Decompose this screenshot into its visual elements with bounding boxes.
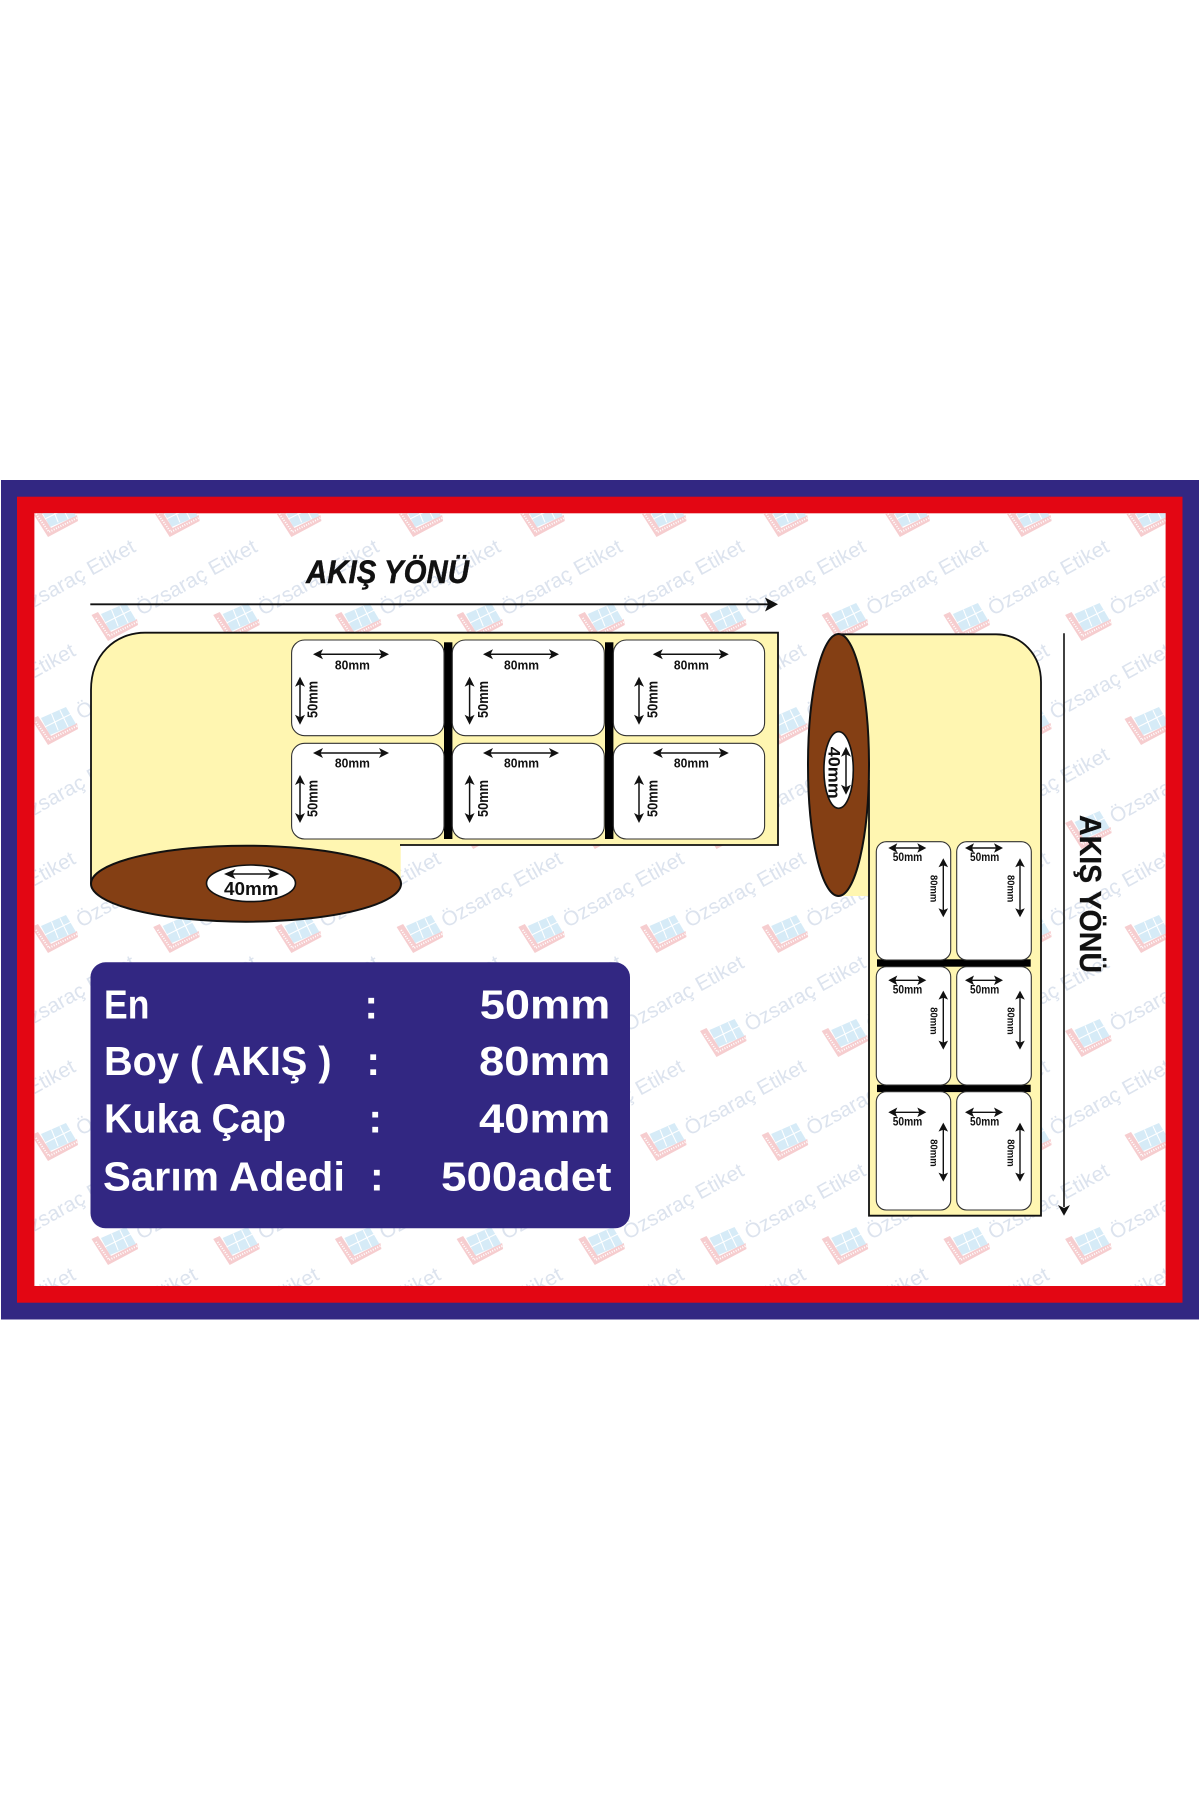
- watermark pattern: Özsaraç Etiket logos: Özsaraç Etiket: [254, 743, 383, 828]
- red inner frame: [17, 497, 1182, 1303]
- watermark pattern: Özsaraç Etiket logos: Özsaraç Etiket: [376, 743, 505, 828]
- heading: AKIŞ YÖNÜ horizontal: AKIŞ YÖNÜ: [305, 554, 470, 590]
- label: column 1 row 2: 50mm: [305, 780, 322, 817]
- arrow: vertical flow direction: [1058, 633, 1070, 1216]
- row: Boy: [104, 1038, 610, 1084]
- watermark pattern: Özsaraç Etiket logos: Özsaraç Etiket: [254, 1159, 383, 1244]
- watermark pattern: Özsaraç Etiket logos: Özsaraç Etiket: [1046, 639, 1175, 724]
- watermark pattern: Özsaraç Etiket logos: Özsaraç Etiket: [681, 1263, 810, 1348]
- label: column 3 row 2: 50mm: [644, 780, 661, 817]
- arrow: horizontal flow direction: [90, 598, 778, 612]
- row: En: :: [364, 981, 378, 1027]
- label: column 2 row 1: 50mm: [475, 681, 492, 718]
- watermark pattern: Özsaraç Etiket logos: Özsaraç Etiket: [559, 847, 688, 932]
- watermark pattern: Özsaraç Etiket logos: Özsaraç Etiket: [984, 951, 1113, 1036]
- label: row 3 right: 50mm: [970, 1116, 999, 1128]
- label: column 2 row 2: [452, 743, 604, 839]
- label sheet separators: [877, 959, 1031, 1092]
- label: row 1 right: 50mm: [970, 852, 999, 864]
- horizontal label roll: [91, 633, 778, 922]
- label: column 1 row 1: 50mm: [305, 681, 322, 718]
- watermark pattern: Özsaraç Etiket logos: Özsaraç Etiket: [72, 847, 201, 932]
- watermark pattern: Özsaraç Etiket logos: Özsaraç Etiket: [924, 1055, 1053, 1140]
- row: Boy: Boy ( AKIŞ ): [104, 1038, 332, 1084]
- core hole with 40mm dimension: [824, 732, 853, 808]
- watermark pattern: Özsaraç Etiket logos: Özsaraç Etiket: [862, 743, 991, 828]
- watermark pattern: Özsaraç Etiket logos: Özsaraç Etiket: [194, 1263, 323, 1348]
- watermark pattern: Özsaraç Etiket logos: Özsaraç Etiket: [132, 535, 261, 620]
- row: Sarım Adedi: 500adet: [441, 1154, 612, 1200]
- watermark pattern: Özsaraç Etiket logos: Özsaraç Etiket: [11, 1159, 140, 1244]
- watermark pattern: Özsaraç Etiket logos: Özsaraç Etiket: [802, 639, 931, 724]
- watermark pattern: Özsaraç Etiket logos: Özsaraç Etiket: [741, 535, 870, 620]
- row: Sarım Adedi: :: [370, 1154, 384, 1200]
- navy outer frame: [1, 480, 1199, 1320]
- watermark pattern: Özsaraç Etiket logos: Özsaraç Etiket: [497, 743, 626, 828]
- label: column 1 row 2: 80mm: [335, 756, 370, 771]
- label: row 1 right: [957, 842, 1031, 960]
- label: row 1 left: 50mm: [893, 852, 922, 864]
- watermark pattern: Özsaraç Etiket logos: Özsaraç Etiket: [924, 1263, 1053, 1348]
- watermark pattern: Özsaraç Etiket logos: Özsaraç Etiket: [132, 1159, 261, 1244]
- watermark pattern: Özsaraç Etiket logos: Özsaraç Etiket: [984, 743, 1113, 828]
- watermark pattern: Özsaraç Etiket logos: Özsaraç Etiket: [681, 639, 810, 724]
- watermark pattern: Özsaraç Etiket logos: Özsaraç Etiket: [11, 743, 140, 828]
- watermark pattern: Özsaraç Etiket logos: [34, 513, 1166, 1286]
- watermark pattern: Özsaraç Etiket logos: Özsaraç Etiket: [741, 1159, 870, 1244]
- label: column 3 row 1: 50mm: [644, 681, 661, 718]
- row: Sarım Adedi: Sarım Adedi: [103, 1154, 345, 1200]
- watermark pattern: Özsaraç Etiket logos: Özsaraç Etiket: [924, 847, 1053, 932]
- label: column 2 row 1: 80mm: [504, 657, 539, 672]
- watermark pattern: Özsaraç Etiket logos: Özsaraç Etiket: [497, 535, 626, 620]
- watermark pattern: Özsaraç Etiket logos: Özsaraç Etiket: [194, 847, 323, 932]
- label: row 3 right: 80mm: [1005, 1139, 1017, 1167]
- watermark pattern: Özsaraç Etiket logos: Özsaraç Etiket: [376, 1159, 505, 1244]
- row: En: [104, 981, 610, 1027]
- row: Kuka Çap: [104, 1096, 610, 1142]
- watermark pattern: Özsaraç Etiket logos: Özsaraç Etiket: [559, 1263, 688, 1348]
- vertical label roll: [808, 634, 1041, 1216]
- label: column 1 row 1: 80mm: [335, 657, 370, 672]
- row: Sarım Adedi: [103, 1154, 612, 1200]
- watermark pattern: Özsaraç Etiket logos: Özsaraç Etiket: [497, 951, 626, 1036]
- label: column 3 row 1: 80mm: [674, 657, 709, 672]
- panel: specifications: [90, 962, 630, 1228]
- watermark pattern: Özsaraç Etiket logos: Özsaraç Etiket: [194, 639, 323, 724]
- core hole with 40mm dimension: 40mm: [224, 879, 279, 899]
- label: row 1 left: [876, 842, 951, 960]
- watermark pattern: Özsaraç Etiket logos: Özsaraç Etiket: [72, 639, 201, 724]
- label: row 2 right: 80mm: [1005, 1007, 1017, 1035]
- watermark pattern: Özsaraç Etiket logos: Özsaraç Etiket: [984, 1159, 1113, 1244]
- label: column 2 row 2: 50mm: [475, 780, 492, 817]
- label: row 2 left: 50mm: [893, 984, 922, 996]
- watermark pattern: Özsaraç Etiket logos: Özsaraç Etiket: [984, 535, 1113, 620]
- watermark pattern: Özsaraç Etiket logos: Özsaraç Etiket: [11, 951, 140, 1036]
- label: row 2 left: 80mm: [928, 1007, 940, 1035]
- watermark pattern: Özsaraç Etiket logos: Özsaraç Etiket: [497, 1159, 626, 1244]
- row: Kuka Çap: :: [368, 1096, 382, 1142]
- label: column 1 row 2: [292, 743, 444, 839]
- watermark pattern: Özsaraç Etiket logos: Özsaraç Etiket: [316, 847, 445, 932]
- watermark pattern: Özsaraç Etiket logos: Özsaraç Etiket: [619, 1159, 748, 1244]
- label: column 3 row 2: [613, 743, 765, 839]
- roll body: [91, 633, 778, 884]
- watermark pattern: Özsaraç Etiket logos: Özsaraç Etiket: [316, 639, 445, 724]
- watermark pattern: Özsaraç Etiket logos: Özsaraç Etiket: [559, 639, 688, 724]
- watermark pattern: Özsaraç Etiket logos: Özsaraç Etiket: [254, 951, 383, 1036]
- watermark pattern: Özsaraç Etiket logos: Özsaraç Etiket: [619, 743, 748, 828]
- watermark pattern: Özsaraç Etiket logos: Özsaraç Etiket: [924, 639, 1053, 724]
- watermark pattern: Özsaraç Etiket logos: Özsaraç Etiket: [862, 951, 991, 1036]
- label: column 3 row 2: 80mm: [674, 756, 709, 771]
- label: row 2 right: [957, 967, 1031, 1085]
- core hole with 40mm dimension: [206, 865, 296, 902]
- row: Kuka Çap: Kuka Çap: [104, 1096, 286, 1142]
- watermark pattern: Özsaraç Etiket logos: Özsaraç Etiket: [1046, 1055, 1175, 1140]
- label: row 1 left: 80mm: [928, 875, 940, 902]
- watermark pattern: Özsaraç Etiket logos: Özsaraç Etiket: [1046, 1263, 1175, 1348]
- row: En: En: [104, 981, 149, 1027]
- watermark pattern: Özsaraç Etiket logos: Özsaraç Etiket: [681, 847, 810, 932]
- watermark pattern: Özsaraç Etiket logos: Özsaraç Etiket: [437, 639, 566, 724]
- label: row 3 left: [876, 1092, 951, 1210]
- watermark pattern: Özsaraç Etiket logos: Özsaraç Etiket: [132, 743, 261, 828]
- label: row 3 left: 50mm: [893, 1116, 922, 1128]
- watermark pattern: Özsaraç Etiket logos: Özsaraç Etiket: [619, 951, 748, 1036]
- label: column 2 row 2: 80mm: [504, 756, 539, 771]
- watermark pattern: Özsaraç Etiket logos: Özsaraç Etiket: [254, 535, 383, 620]
- label: column 1 row 1: [292, 640, 444, 736]
- label: row 3 right: [957, 1092, 1031, 1210]
- label: column 2 row 1: [452, 640, 604, 736]
- watermark pattern: Özsaraç Etiket logos: Özsaraç Etiket: [72, 1263, 201, 1348]
- roll body: [838, 634, 1041, 1216]
- watermark pattern: Özsaraç Etiket logos: Özsaraç Etiket: [437, 1055, 566, 1140]
- watermark pattern: Özsaraç Etiket logos: Özsaraç Etiket: [376, 535, 505, 620]
- watermark pattern: Özsaraç Etiket logos: Özsaraç Etiket: [132, 951, 261, 1036]
- watermark pattern: Özsaraç Etiket logos: Özsaraç Etiket: [619, 535, 748, 620]
- core hole with 40mm dimension: 40mm: [824, 747, 844, 799]
- label: row 1 right: 80mm: [1005, 875, 1017, 902]
- row: Boy: 80mm: [479, 1038, 610, 1084]
- label: row 3 left: 80mm: [928, 1139, 940, 1167]
- watermark pattern: Özsaraç Etiket logos: Özsaraç Etiket: [316, 1263, 445, 1348]
- watermark pattern: Özsaraç Etiket logos: Özsaraç Etiket: [72, 1055, 201, 1140]
- watermark pattern: Özsaraç Etiket logos: Özsaraç Etiket: [802, 847, 931, 932]
- roll core end: brown disc: [91, 846, 401, 922]
- row: Boy: :: [366, 1038, 380, 1084]
- watermark pattern: Özsaraç Etiket logos: Özsaraç Etiket: [1046, 847, 1175, 932]
- watermark pattern: Özsaraç Etiket logos: Özsaraç Etiket: [862, 535, 991, 620]
- watermark pattern: Özsaraç Etiket logos: Özsaraç Etiket: [194, 1055, 323, 1140]
- watermark pattern: Özsaraç Etiket logos: Özsaraç Etiket: [376, 951, 505, 1036]
- label: row 2 right: 50mm: [970, 984, 999, 996]
- roll core end: brown disc: [808, 634, 869, 896]
- watermark pattern: Özsaraç Etiket logos: Özsaraç Etiket: [11, 535, 140, 620]
- watermark pattern: Özsaraç Etiket logos: Özsaraç Etiket: [862, 1159, 991, 1244]
- row: Kuka Çap: 40mm: [479, 1096, 610, 1142]
- watermark pattern: Özsaraç Etiket logos: Özsaraç Etiket: [559, 1055, 688, 1140]
- label sheet separators: [444, 642, 613, 839]
- watermark pattern: Özsaraç Etiket logos: Özsaraç Etiket: [741, 743, 870, 828]
- watermark pattern: Özsaraç Etiket logos: Özsaraç Etiket: [741, 951, 870, 1036]
- white background panel: [34, 513, 1166, 1286]
- watermark pattern: Özsaraç Etiket logos: Özsaraç Etiket: [802, 1263, 931, 1348]
- heading: AKIŞ YÖNÜ vertical: AKIŞ YÖNÜ: [1073, 815, 1108, 973]
- row: En: 50mm: [480, 981, 610, 1027]
- label: column 3 row 1: [613, 640, 765, 736]
- watermark pattern: Özsaraç Etiket logos: Özsaraç Etiket: [316, 1055, 445, 1140]
- watermark pattern: Özsaraç Etiket logos: Özsaraç Etiket: [681, 1055, 810, 1140]
- watermark pattern: Özsaraç Etiket logos: Özsaraç Etiket: [802, 1055, 931, 1140]
- label: row 2 left: [876, 967, 951, 1085]
- watermark pattern: Özsaraç Etiket logos: Özsaraç Etiket: [437, 1263, 566, 1348]
- watermark pattern: Özsaraç Etiket logos: Özsaraç Etiket: [437, 847, 566, 932]
